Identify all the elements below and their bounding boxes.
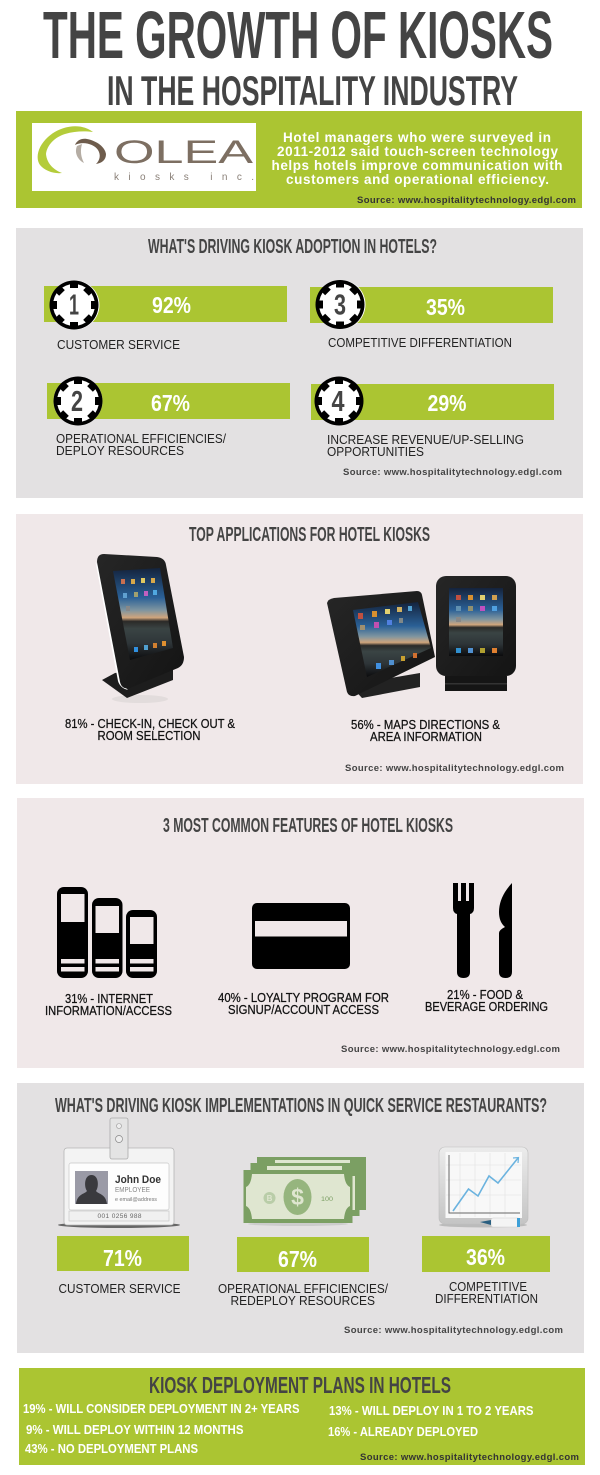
stat: operational efficiencies: REDEPLOY RESOURCES xyxy=(230,1294,375,1308)
icon: tilted kiosk xyxy=(96,554,184,703)
label: loyalty: 40% - LOYALTY PROGRAM FOR xyxy=(218,991,389,1005)
icon: whiteboard chart xyxy=(439,1147,528,1228)
label: maps: 56% - MAPS DIRECTIONS & xyxy=(351,718,501,732)
stat: competitive differentiation: DIFFERENTIATION xyxy=(435,1292,538,1306)
right list xyxy=(328,1404,534,1439)
icon: landscape kiosk xyxy=(327,591,435,698)
icon: fork and knife xyxy=(453,883,512,978)
stat 3: competitive differentiation: COMPETITIVE DIFFERENTIATION xyxy=(328,336,512,350)
label: maps: AREA INFORMATION xyxy=(370,730,482,744)
stat 4: increase revenue: 29% xyxy=(428,390,466,416)
icon: banknotes xyxy=(244,1157,366,1226)
stat: operational efficiencies xyxy=(218,1237,388,1308)
stat 2: operational efficiencies: 2 xyxy=(71,386,83,418)
stat 2: operational efficiencies: 67% xyxy=(151,390,190,416)
source: Source: www.hospitalitytechnology.edgl.com xyxy=(360,1452,579,1463)
intro text: 2011-2012 said touch-screen technology xyxy=(277,144,558,159)
stat 3: competitive differentiation: 3 xyxy=(334,290,346,322)
stat: operational efficiencies: 67% xyxy=(278,1246,317,1272)
label: food: 21% - FOOD & xyxy=(447,988,524,1002)
left list: 19% - WILL CONSIDER DEPLOYMENT IN 2+ YEARS xyxy=(23,1402,300,1416)
panel: common features xyxy=(17,798,584,1068)
label: maps xyxy=(351,718,501,744)
stat 4: increase revenue xyxy=(311,376,554,459)
logo: Olea Kiosks xyxy=(32,123,256,191)
stat 1: customer service: CUSTOMER SERVICE xyxy=(57,338,180,352)
stat 2: operational efficiencies xyxy=(47,376,290,458)
icon: banknotes: B xyxy=(267,1194,273,1203)
label: check-in: ROOM SELECTION xyxy=(98,729,200,743)
panel: kiosk adoption in hotels xyxy=(16,228,583,498)
right list: 13% - WILL DEPLOY IN 1 TO 2 YEARS xyxy=(329,1404,534,1418)
icon: employee badge xyxy=(58,1118,180,1228)
icon: card xyxy=(252,903,350,969)
icon: portrait kiosk xyxy=(436,576,516,691)
intro text: customers and operational efficiency. xyxy=(286,172,549,187)
stat: customer service: 71% xyxy=(103,1245,142,1271)
stat 4: increase revenue: OPPORTUNITIES xyxy=(327,445,424,459)
stat: competitive differentiation xyxy=(422,1236,550,1306)
icon: employee badge: John Doe xyxy=(115,1174,161,1186)
title xyxy=(43,0,553,114)
stat 3: competitive differentiation: 35% xyxy=(426,294,465,320)
label: food: BEVERAGE ORDERING xyxy=(425,1000,548,1014)
stat: competitive differentiation: COMPETITIVE xyxy=(449,1280,527,1294)
stat: customer service: CUSTOMER SERVICE xyxy=(58,1282,180,1296)
panel: intro banner xyxy=(16,111,582,208)
icon: employee badge: 001 0256 988 xyxy=(98,1213,142,1220)
icon: phones xyxy=(57,887,157,978)
stat 4: increase revenue: INCREASE REVENUE/UP-SELLING xyxy=(327,433,524,447)
intro text xyxy=(272,130,562,187)
label: internet: 31% - INTERNET xyxy=(65,992,153,1006)
label: food xyxy=(425,988,548,1014)
logo: Olea Kiosks: OLEA xyxy=(114,134,254,170)
source: Source: www.hospitalitytechnology.edgl.com xyxy=(341,1044,560,1055)
right list: 16% - ALREADY DEPLOYED xyxy=(328,1425,478,1439)
source: Source: www.hospitalitytechnology.edgl.com xyxy=(344,1325,563,1336)
stat 1: customer service xyxy=(44,280,287,352)
logo: Olea Kiosks: kiosks inc. xyxy=(114,172,254,183)
left list: 43% - NO DEPLOYMENT PLANS xyxy=(25,1442,198,1456)
stat 1: customer service: 92% xyxy=(152,292,191,318)
icon: banknotes: 100 xyxy=(321,1196,333,1203)
stat: operational efficiencies: OPERATIONAL EFFICIENCIES/ xyxy=(218,1282,388,1296)
icon: banknotes: $ xyxy=(291,1184,304,1210)
stat: customer service xyxy=(57,1236,189,1296)
source: Source: www.hospitalitytechnology.edgl.com xyxy=(343,467,562,478)
stat 2: operational efficiencies: OPERATIONAL EFFICIENCIES/ xyxy=(56,432,226,446)
panel: top applications xyxy=(16,514,583,784)
icon: employee badge: EMPLOYEE xyxy=(115,1187,150,1194)
label: check-in: 81% - CHECK-IN, CHECK OUT & xyxy=(65,717,236,731)
intro text: helps hotels improve communication with xyxy=(272,158,562,173)
source: Source: www.hospitalitytechnology.edgl.com xyxy=(357,195,576,206)
left list: 9% - WILL DEPLOY WITHIN 12 MONTHS xyxy=(26,1423,244,1437)
stat 3: competitive differentiation xyxy=(310,280,553,350)
stat 2: operational efficiencies: DEPLOY RESOURCES xyxy=(56,444,184,458)
stat: competitive differentiation: 36% xyxy=(466,1244,505,1270)
label: internet xyxy=(45,992,172,1018)
label: check-in xyxy=(65,717,236,743)
heading: KIOSK DEPLOYMENT PLANS IN HOTELS xyxy=(149,1372,451,1398)
source: Source: www.hospitalitytechnology.edgl.com xyxy=(345,763,564,774)
stat 1: customer service: 1 xyxy=(69,290,79,322)
left list xyxy=(23,1402,300,1456)
panel: deployment plans xyxy=(19,1368,585,1465)
icon: employee badge: e email@address xyxy=(115,1197,158,1203)
label: loyalty xyxy=(218,991,389,1017)
label: loyalty: SIGNUP/ACCOUNT ACCESS xyxy=(228,1003,379,1017)
panel: quick service restaurants xyxy=(17,1083,584,1353)
label: internet: INFORMATION/ACCESS xyxy=(45,1004,172,1018)
stat 4: increase revenue: 4 xyxy=(332,386,344,418)
intro text: Hotel managers who were surveyed in xyxy=(283,130,551,145)
heading: TOP APPLICATIONS FOR HOTEL KIOSKS xyxy=(189,524,430,546)
